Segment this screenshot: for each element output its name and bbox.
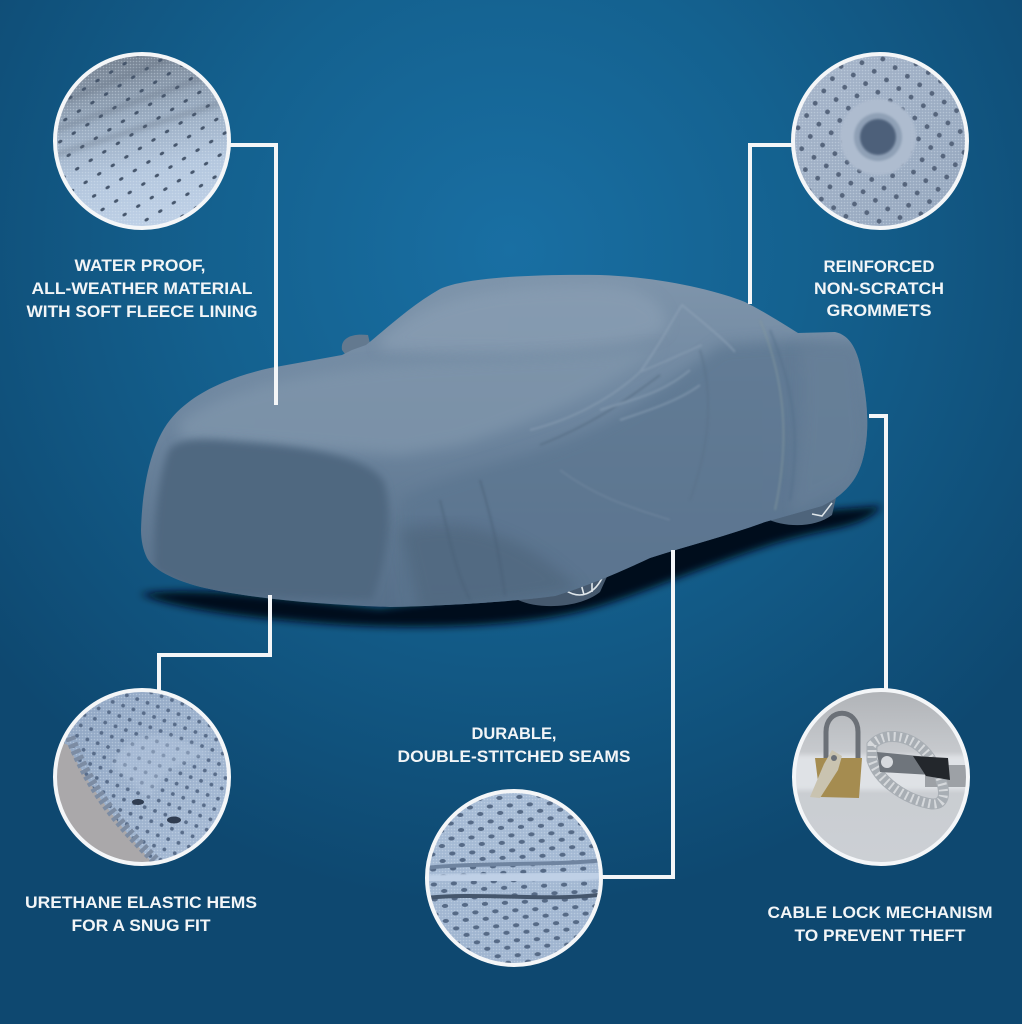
front wheel xyxy=(518,570,610,606)
rear shading xyxy=(790,345,868,515)
photo: padlock and cable xyxy=(796,692,966,862)
panel: seams xyxy=(398,724,630,972)
car shadow xyxy=(140,506,882,627)
side mirror xyxy=(342,335,372,358)
panel: grommets xyxy=(790,50,974,320)
circle ring xyxy=(794,690,968,864)
caption: REINFORCED xyxy=(824,257,934,276)
photo: elastic hem xyxy=(57,692,227,862)
caption xyxy=(398,724,630,766)
cover body xyxy=(130,265,880,615)
wrinkles xyxy=(440,305,784,530)
caption: WATER PROOF, xyxy=(74,256,206,275)
photo: grommet xyxy=(795,56,965,226)
caption: CABLE LOCK MECHANISM xyxy=(768,903,992,922)
caption: WITH SOFT FLEECE LINING xyxy=(26,302,258,321)
photo: fleece fabric xyxy=(57,56,227,226)
caption: URETHANE ELASTIC HEMS xyxy=(25,893,257,912)
circle ring xyxy=(427,791,601,965)
hood highlight xyxy=(182,363,620,455)
caption xyxy=(814,257,944,320)
front grille shadow xyxy=(154,440,389,600)
covered car xyxy=(130,265,880,615)
circle ring xyxy=(793,54,967,228)
circle ring xyxy=(55,54,229,228)
caption: NON-SCRATCH xyxy=(814,279,944,298)
lower side shadow xyxy=(404,525,568,606)
panel: water proof xyxy=(26,50,258,321)
panel: elastic hems xyxy=(25,685,257,935)
caption: GROMMETS xyxy=(826,301,932,320)
side panel shading xyxy=(400,340,875,610)
photo: stitched seam xyxy=(429,793,599,963)
rear wheel xyxy=(765,498,836,525)
caption: TO PREVENT THEFT xyxy=(794,926,966,945)
caption xyxy=(25,893,257,935)
roof highlight xyxy=(385,292,660,353)
caption: FOR A SNUG FIT xyxy=(72,916,211,935)
caption xyxy=(768,903,992,945)
caption: ALL-WEATHER MATERIAL xyxy=(32,279,252,298)
caption: DOUBLE-STITCHED SEAMS xyxy=(398,747,630,766)
caption xyxy=(26,256,258,321)
connector lines xyxy=(159,145,886,877)
circle ring xyxy=(55,690,229,864)
panel: cable lock xyxy=(768,685,992,945)
caption: DURABLE, xyxy=(472,724,556,743)
